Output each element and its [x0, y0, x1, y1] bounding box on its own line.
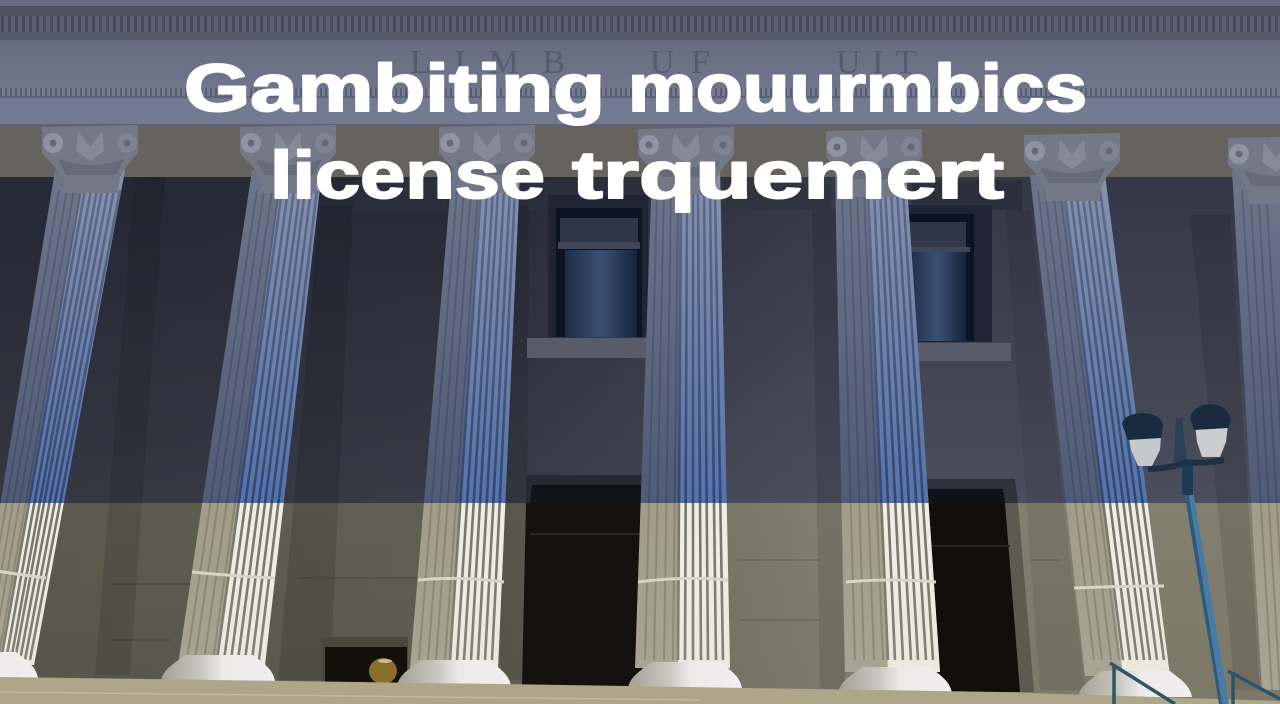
left window — [527, 195, 648, 358]
title line 2 — [270, 138, 1004, 213]
left lantern — [1122, 413, 1163, 466]
title line 1 — [184, 51, 1087, 126]
title line 1: mouurmbics — [628, 51, 1087, 126]
column 2 — [161, 125, 336, 681]
column 6 — [1024, 133, 1192, 697]
lamp finial — [1174, 418, 1187, 462]
stone steps — [0, 677, 1280, 704]
lamp pole — [1184, 490, 1229, 704]
right lantern — [1190, 404, 1231, 457]
title — [184, 51, 1087, 213]
carved inscription right: UIT — [836, 44, 916, 81]
soffit under entablature — [0, 125, 1280, 177]
column 3 — [397, 125, 535, 686]
column 1 — [0, 125, 138, 678]
title line 1: Gambiting — [184, 51, 605, 126]
left door — [522, 475, 642, 686]
entablature — [0, 0, 1280, 127]
title line 2: trquemert — [572, 138, 1004, 213]
pilaster shadows and wall recesses — [0, 172, 1260, 690]
street lamp — [1122, 404, 1231, 704]
carved inscription middle: UF — [650, 44, 710, 81]
column 5 — [826, 129, 952, 693]
right handrail — [1228, 671, 1280, 704]
right window — [896, 205, 1011, 361]
left handrail — [1110, 663, 1175, 704]
carved inscription: LIMB — [410, 44, 565, 81]
lamp arm — [1148, 460, 1224, 469]
small lit doorway — [322, 637, 408, 684]
title line 2: license — [270, 138, 545, 213]
column 7 — [1228, 136, 1280, 690]
column 4 — [628, 127, 742, 688]
right door — [924, 479, 1034, 692]
